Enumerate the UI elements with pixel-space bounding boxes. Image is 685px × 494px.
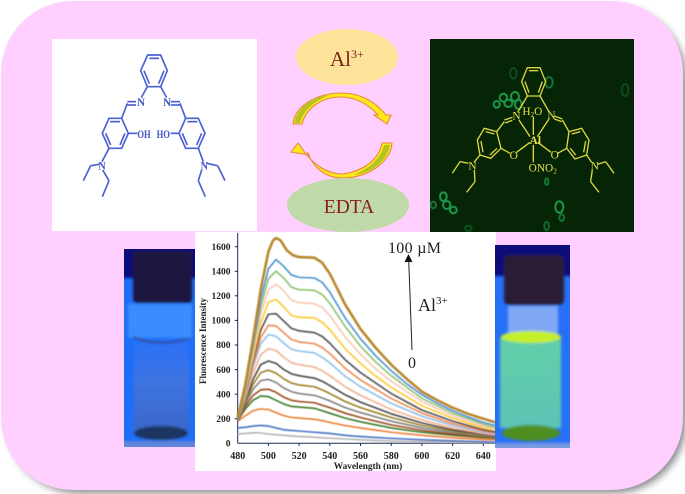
panel: aluminium complex on fluorescence micrograph: N [468, 161, 477, 173]
photo: left vial without Al3+ [124, 249, 195, 447]
panel: ligand structure [52, 39, 257, 231]
y axis tick labels: 1600 [212, 243, 231, 253]
x axis tick labels: 620 [445, 451, 460, 462]
arrow: increasing Al3+ [404, 254, 412, 350]
x axis tick labels: 500 [261, 451, 276, 462]
panel: ligand structure: N [163, 95, 171, 109]
panel: aluminium complex on fluorescence micrograph: ONO [529, 163, 553, 175]
panel: ligand structure: OH [137, 127, 151, 141]
panel: ligand structure: HO [157, 127, 170, 141]
x axis tick labels: 540 [322, 451, 337, 462]
panel: aluminium complex on fluorescence micrograph: H [522, 106, 531, 118]
oval: EDTA: EDTA [324, 197, 374, 218]
y axis title: Fluorescence Intensity [198, 297, 208, 384]
x axis tick labels: 640 [476, 451, 491, 462]
x axis tick labels [230, 451, 491, 462]
y axis tick labels: 1200 [212, 292, 231, 302]
y axis tick labels: 1400 [212, 268, 231, 278]
y axis tick labels: 200 [216, 415, 231, 425]
panel: fluorescence spectrum chart [195, 232, 496, 472]
y axis tick labels: 1000 [212, 317, 231, 327]
y axis tick labels: 0 [226, 440, 231, 450]
oval: Al3+ [296, 29, 398, 85]
panel: aluminium complex on fluorescence micrograph: N [512, 111, 521, 123]
panel: aluminium complex on fluorescence micrograph: N [591, 161, 599, 173]
y axis tick labels [212, 243, 231, 450]
oval: Al3+: Al [330, 47, 351, 71]
y axis tick labels: 800 [216, 341, 231, 351]
y axis tick labels: 400 [216, 390, 231, 400]
oval: EDTA [287, 178, 409, 232]
x axis tick labels: 520 [292, 451, 307, 462]
panel: aluminium complex on fluorescence micrograph: O [534, 106, 542, 118]
panel: ligand structure: N [98, 159, 106, 173]
label: Al3+: Al [418, 295, 436, 315]
x axis tick labels: 580 [384, 451, 399, 462]
x axis tick labels: 600 [414, 451, 429, 462]
panel: aluminium complex on fluorescence micrograph: Al [530, 135, 541, 147]
y axis tick labels: 600 [216, 366, 231, 376]
panel: ligand structure: N [201, 159, 208, 173]
x axis title: Wavelength (nm) [334, 461, 402, 472]
photo: right vial with Al3+ [495, 245, 570, 448]
axes [235, 233, 495, 446]
arrow: bottom curved arrow [291, 143, 392, 178]
panel: aluminium complex on fluorescence micrograph: O [551, 149, 559, 161]
panel: aluminium complex on fluorescence micrograph: N [547, 110, 556, 122]
x axis tick labels: 480 [230, 451, 245, 462]
label: Al3+: 3+ [436, 295, 448, 307]
panel: aluminium complex on fluorescence micrograph: O [510, 150, 518, 162]
arrow: top curved arrow [293, 93, 391, 124]
oval: Al3+: 3+ [351, 47, 364, 61]
label: 100 µM: 100 µM [388, 240, 441, 257]
x axis tick labels: 560 [353, 451, 368, 462]
panel: aluminium complex on fluorescence micrograph: 2 [531, 110, 535, 119]
spectral curves [238, 238, 496, 443]
panel: aluminium complex on fluorescence micrograph [430, 39, 634, 232]
panel: ligand structure: N [137, 95, 145, 109]
label: 0: 0 [408, 355, 416, 372]
panel: aluminium complex on fluorescence micrograph: 2 [553, 167, 557, 176]
